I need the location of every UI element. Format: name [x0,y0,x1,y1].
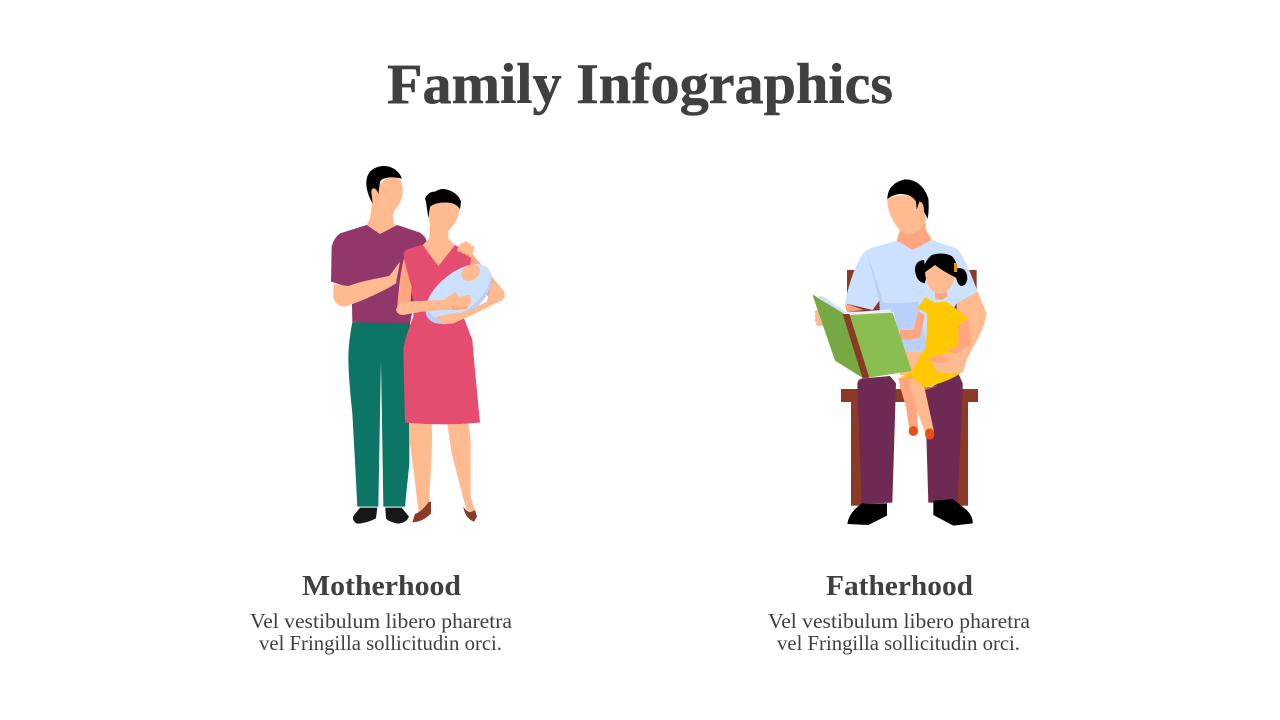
man: arm [333,262,400,307]
chair back [847,270,977,312]
title: Family Infographics [387,53,893,116]
father: lap [900,352,928,375]
text: motherhood description: vel Fringilla sollicitudin orci. [259,631,502,655]
father: hand holding book [817,311,826,324]
caption: fatherhood [768,571,1031,655]
father: trousers [857,373,963,503]
man: shoes [353,508,409,524]
text: motherhood description: Vel vestibulum libero pharetra [250,609,513,633]
daughter: skirt inner edge [924,386,938,390]
woman: hand on shoulder [459,243,472,255]
text: fatherhood description [768,609,1031,655]
woman: far arm [467,253,504,300]
caption: motherhood [250,571,513,655]
heading: fatherhood: Fatherhood [826,571,973,602]
baby [415,254,502,335]
woman: legs [410,420,476,517]
illustration: father reading to daughter [812,179,987,526]
daughter: legs and shoes [898,375,934,440]
heading: motherhood: Motherhood [302,571,461,602]
father: head and neck [887,179,932,250]
text: motherhood description [250,609,513,655]
text: fatherhood description: vel Fringilla sollicitudin orci. [777,631,1020,655]
daughter: dress [900,297,968,387]
book [812,294,912,378]
woman: arms cradling baby [396,280,505,324]
father: shirt [845,240,978,352]
man: trousers [348,322,410,507]
woman: dress [403,245,480,424]
chair seat and legs [841,389,978,506]
man: head and hair [366,166,403,238]
daughter: head and hair [915,254,967,300]
father: upper arm [845,304,863,312]
woman: head and hair [423,189,461,266]
text: fatherhood description: Vel vestibulum libero pharetra [768,609,1031,633]
illustration: couple with newborn [331,166,505,524]
man: shirt [331,225,427,323]
father: far arm [947,291,987,367]
father: shirt shadow [867,252,928,352]
woman: shoulder arm [397,258,412,307]
woman: heels [412,502,477,522]
father: shoes [847,499,973,526]
daughter: arms [900,312,972,373]
